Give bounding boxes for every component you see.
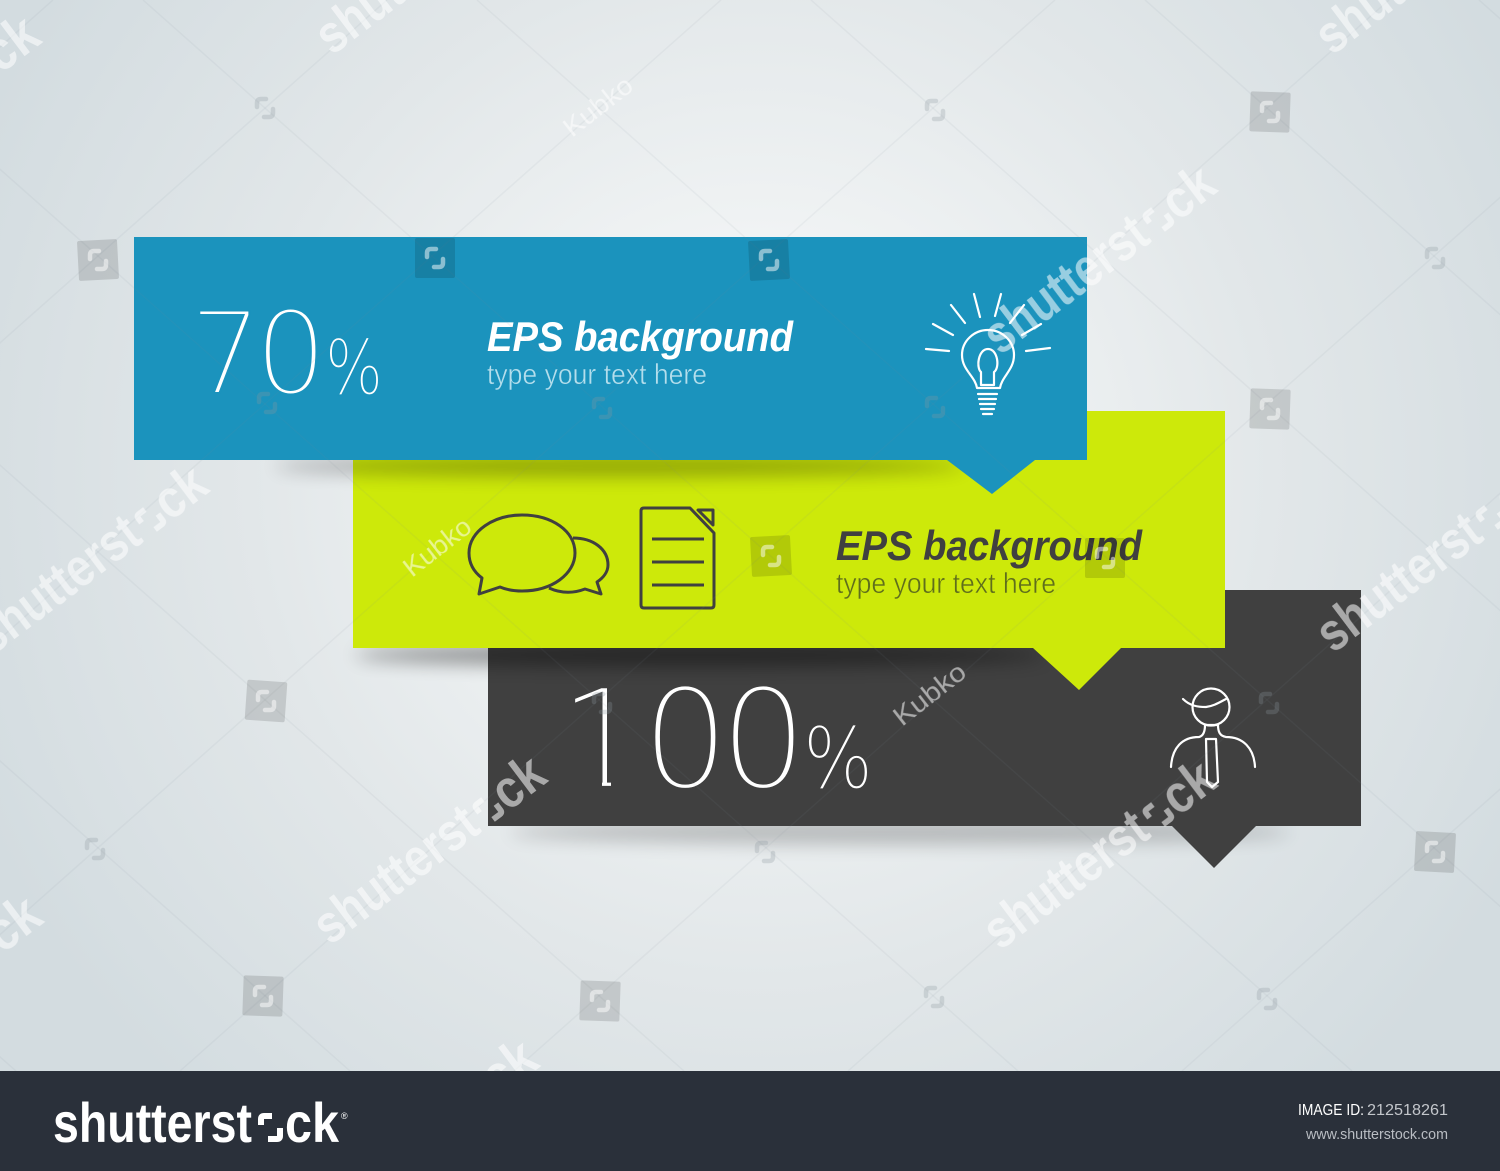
watermarks: Kubko <box>557 70 639 143</box>
icon: light bulb <box>926 294 1050 414</box>
watermarks: ck <box>479 742 557 822</box>
watermarks: Kubko <box>397 511 477 583</box>
large number: 0 <box>642 661 729 820</box>
subtext: type your text here <box>487 359 707 391</box>
icon: document <box>641 508 714 608</box>
watermark squares <box>77 91 1456 1022</box>
percent sign: % <box>803 710 873 809</box>
image id: IMAGE ID: <box>1298 1102 1364 1119</box>
watermarks: ck <box>468 1025 549 1108</box>
watermarks: shutterst <box>971 203 1160 366</box>
subtext: type your text here <box>836 568 1056 600</box>
percent sign: % <box>325 323 383 412</box>
site url: www.shutterstock.com <box>1305 1127 1448 1143</box>
watermarks: ck <box>1149 152 1227 232</box>
panel: green bar <box>353 411 1225 690</box>
watermarks: ck <box>141 452 219 532</box>
panel: blue bar <box>134 237 1087 494</box>
small watermark brackets <box>87 99 1443 1008</box>
large number: 0 <box>720 661 807 820</box>
large number: 0 <box>255 288 327 420</box>
icon: speech bubbles <box>469 515 608 594</box>
heading: EPS background <box>836 522 1143 569</box>
watermarks: shutterst <box>971 798 1160 961</box>
watermarks: Kubko <box>887 656 972 732</box>
footer bar <box>0 1071 1500 1171</box>
footer logo: ® <box>341 1111 348 1121</box>
icon: businessman <box>1171 688 1255 787</box>
footer logo: ck <box>285 1091 340 1154</box>
large number <box>559 661 807 820</box>
watermarks: shutterst <box>301 793 490 956</box>
panel: dark bar <box>488 590 1361 868</box>
large number <box>190 288 327 420</box>
footer bar: 212518261 <box>1367 1102 1448 1119</box>
watermarks: ck <box>1149 747 1227 827</box>
large number: 7 <box>190 288 262 420</box>
large number: 1 <box>559 661 646 820</box>
footer logo: shutterst <box>53 1091 252 1154</box>
heading: EPS background <box>487 313 794 360</box>
